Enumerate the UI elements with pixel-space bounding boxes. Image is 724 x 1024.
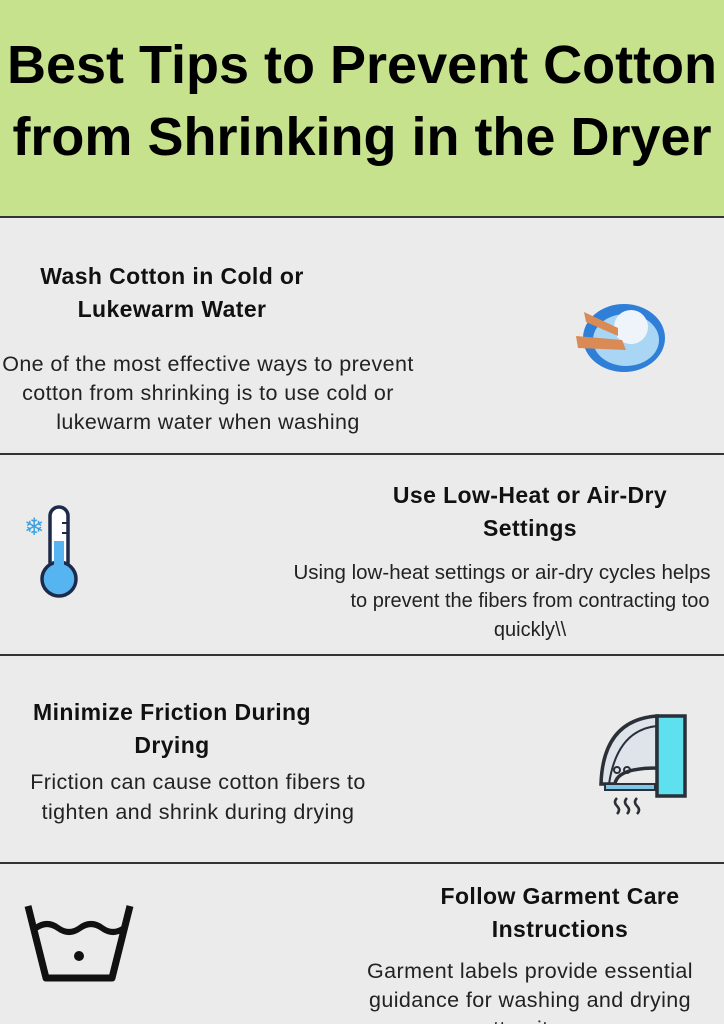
heading 3 — [33, 699, 311, 758]
body 3: Friction can cause cotton fibers to — [30, 770, 366, 794]
title — [7, 35, 717, 167]
body 1: One of the most effective ways to prevent — [2, 352, 414, 376]
heading 2: Use Low-Heat or Air-Dry — [393, 482, 667, 508]
icon: washing bowl — [576, 304, 665, 372]
body 2: quickly\\ — [494, 619, 566, 641]
panel: care instructions — [24, 883, 693, 1024]
panel: low heat — [24, 482, 710, 641]
heading 4: Instructions — [492, 916, 628, 942]
heading 1: Wash Cotton in Cold or — [40, 263, 304, 289]
body 1: cotton from shrinking is to use cold or — [22, 381, 394, 405]
icon: thermometer: ❄ — [24, 513, 44, 541]
body 4 — [367, 959, 693, 1024]
body 2 — [294, 561, 710, 641]
panel: friction — [30, 699, 687, 824]
body 4: guidance for washing and drying — [369, 988, 691, 1012]
title banner — [0, 0, 724, 217]
body 3 — [30, 770, 366, 824]
heading 2: Settings — [483, 515, 577, 541]
body 1 — [2, 352, 414, 434]
heading 3: Minimize Friction During — [33, 699, 311, 725]
icon: thermometer — [24, 505, 78, 598]
heading 1: Lukewarm Water — [78, 296, 266, 322]
body 3: tighten and shrink during drying — [42, 800, 354, 824]
heading 2 — [393, 482, 667, 541]
title: Best Tips to Prevent Cotton — [7, 35, 717, 95]
heading 3: Drying — [134, 732, 210, 758]
panel: cold water — [2, 263, 665, 434]
body 1: lukewarm water when washing — [56, 410, 360, 434]
heading 1 — [40, 263, 304, 322]
title: from Shrinking in the Dryer — [12, 107, 712, 167]
body 4: Garment labels provide essential — [367, 959, 693, 983]
icon: wash tub symbol — [24, 905, 134, 982]
heading 4 — [441, 883, 679, 942]
body 2: Using low-heat settings or air-dry cycles helps — [294, 561, 710, 584]
heading 4: Follow Garment Care — [441, 883, 679, 909]
body 2: to prevent the fibers from contracting too — [350, 590, 710, 612]
icon: hand dryer — [599, 714, 687, 815]
